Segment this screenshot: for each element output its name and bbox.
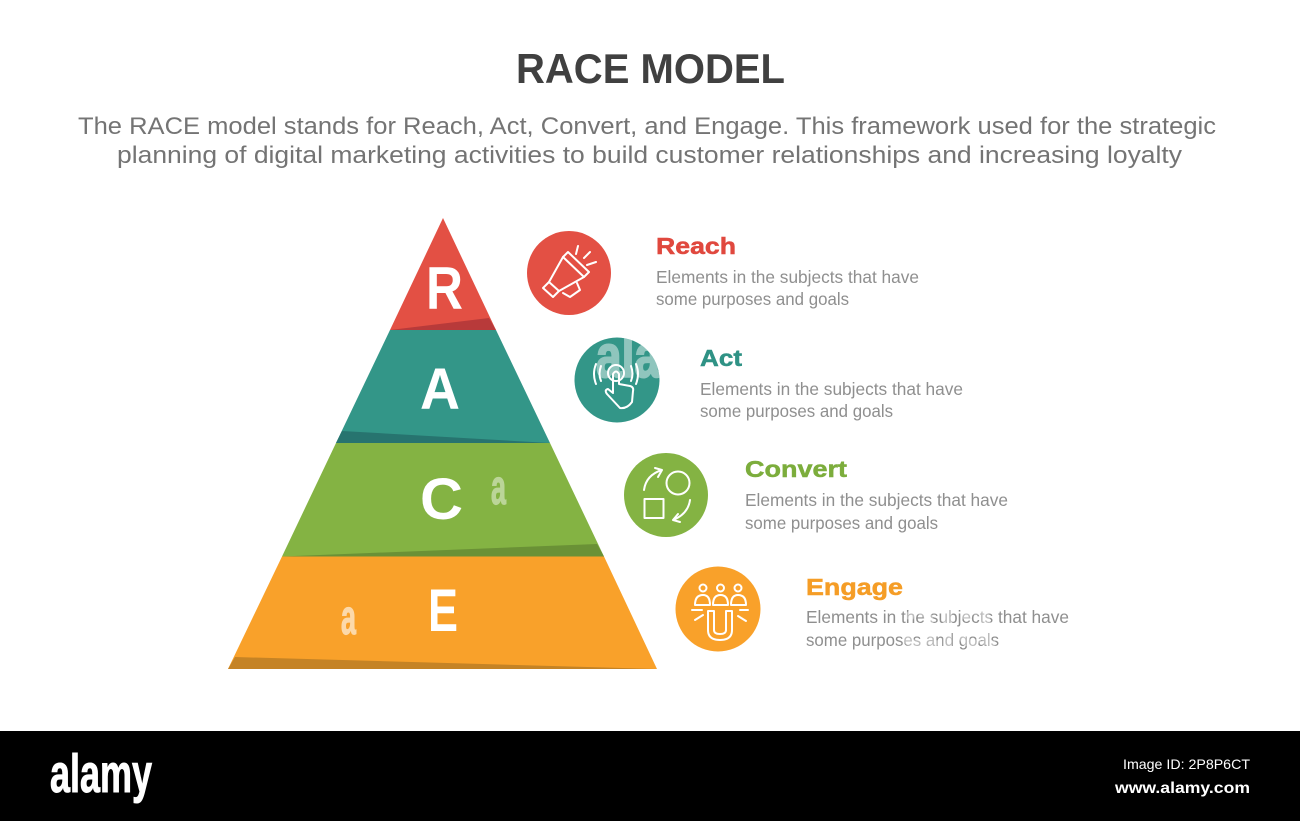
pyramid level: E: E: [428, 577, 458, 644]
description: Engage: [806, 583, 1069, 661]
pyramid level: E: a: [341, 591, 356, 645]
pyramid level: C: a: [491, 461, 506, 515]
heading: Convert: Convert: [745, 456, 847, 482]
pyramid level: C: C: [420, 467, 463, 532]
description: Reach: some purposes and goals: [656, 289, 849, 309]
pyramid level: C: [282, 443, 604, 556]
item: Reach: [527, 231, 919, 315]
pyramid chart: [228, 218, 657, 669]
pyramid level: E: [228, 556, 657, 669]
description: Reach: Elements in the subjects that have: [656, 267, 919, 287]
description: Act: [700, 379, 963, 421]
icon: tapping hand: [574, 338, 660, 422]
description: Act: Elements in the subjects that have: [700, 379, 963, 399]
description: Convert: [745, 490, 1008, 533]
website url: www.alamy.com: [1114, 780, 1250, 797]
image id: Image ID: 2P8P6CT: [1123, 756, 1250, 772]
pyramid level: A: A: [420, 357, 460, 422]
watermark footer bar: [0, 731, 1300, 821]
description: Engage: ala: [900, 583, 996, 661]
description: Convert: Elements in the subjects that have: [745, 490, 1008, 510]
item: Engage: [676, 566, 1069, 661]
description: Engage: some purposes and goals: [806, 630, 999, 650]
item: Act: [574, 338, 962, 422]
pyramid level: R: [390, 218, 496, 330]
icon: shapes with arrows: [624, 453, 708, 537]
subtitle text block: The RACE model stands for Reach, Act, Convert, and Engage. This framework used for the strategic: [78, 113, 1216, 140]
item: Convert: [624, 453, 1008, 537]
icon: people and magnet: [676, 566, 760, 652]
description: Engage: Elements in the subjects that have: [806, 607, 1069, 627]
heading: Engage: Engage: [806, 574, 903, 600]
icon: megaphone: [527, 231, 611, 315]
heading: Act: Act: [700, 345, 742, 371]
subtitle text block: planning of digital marketing activities to build customer relationships and increasing loyalty: [117, 142, 1182, 169]
description: Act: some purposes and goals: [700, 401, 893, 421]
title: RACE MODEL: [516, 45, 785, 92]
heading: Reach: Reach: [656, 233, 736, 259]
icon: tapping hand: ala: [596, 323, 660, 390]
watermark logo: alamy: [50, 744, 152, 804]
description: Convert: some purposes and goals: [745, 513, 938, 533]
description: Reach: [656, 267, 919, 309]
pyramid level: A: [336, 330, 550, 443]
subtitle text block: [78, 113, 1216, 169]
pyramid level: R: R: [426, 255, 463, 322]
